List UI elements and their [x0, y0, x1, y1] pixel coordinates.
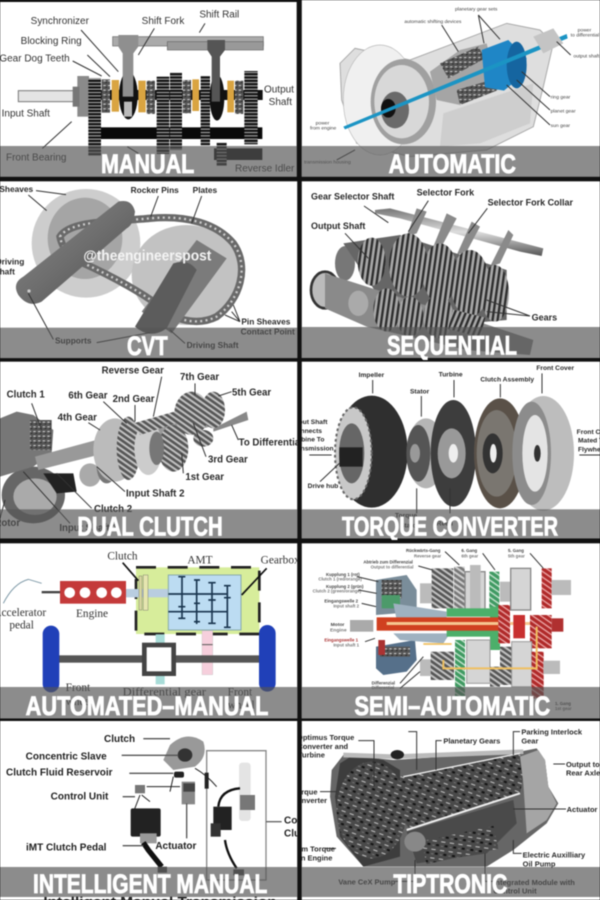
manual labels and leader lines: Reverse Idler [235, 164, 295, 175]
torque converter labels and leader lines: Turbine [439, 372, 463, 379]
tiptronic labels and leader lines: Parking Interlock [521, 728, 583, 737]
semi automatic labels and leader lines: Output to differential [371, 565, 413, 570]
tiptronic labels and leader lines [288, 728, 600, 896]
torque converter labels and leader lines: Reed [437, 521, 453, 528]
manual labels and leader lines: Blocking Ring [21, 36, 82, 47]
panel: cvt [0, 181, 297, 361]
dual clutch labels and leader lines: Clutch 1 [7, 390, 45, 401]
imt labels and leader lines: Clutch [104, 734, 135, 745]
cvt labels and leader lines: Driving Shaft [187, 340, 239, 350]
imt labels and leader lines [6, 734, 347, 900]
cvt title bar [0, 328, 297, 358]
amt labels and leader lines: Gearbox [261, 554, 300, 566]
dual clutch title bar [0, 509, 297, 538]
automatic labels and leader lines: sun gear [551, 123, 570, 129]
manual labels and leader lines: Input Shaft [2, 109, 50, 120]
cvt pulley and belt diagram [16, 189, 242, 334]
automatic labels and leader lines: transmission housing [304, 160, 351, 166]
panel: sequential [302, 181, 600, 360]
semi automatic labels and leader lines: 5. Gang [508, 548, 524, 553]
automatic labels and leader lines [304, 6, 600, 166]
tiptronic labels and leader lines: Main Engine [288, 853, 332, 862]
watermark: handle: @theengineerspost [83, 248, 212, 264]
semi automatic labels and leader lines: Clutch 1 (red/orange) [318, 577, 362, 582]
amt labels and leader lines: Differential gear [123, 687, 206, 699]
semi automatic labels and leader lines: Differential [372, 685, 394, 690]
automatic labels and leader lines: power [578, 27, 592, 33]
panel: torque converter [291, 362, 600, 541]
torque converter labels and leader lines: Clutch Assembly [480, 377, 534, 384]
dual clutch labels and leader lines: To Differential [239, 438, 303, 449]
panel: intelligent manual [0, 721, 347, 900]
dual clutch labels and leader lines: Reverse Gear [102, 366, 164, 377]
imt title bar [0, 867, 297, 897]
automatic title bar [302, 146, 600, 177]
cvt labels and leader lines: Sheaves [0, 184, 34, 194]
panel: manual [0, 2, 297, 179]
dual clutch labels and leader lines: 4th Gear [58, 413, 97, 424]
semi automatic labels and leader lines: Reverse gear [414, 553, 442, 558]
heading: intelligent manual: INTELLIGENT MANUAL [33, 869, 267, 899]
manual labels and leader lines [0, 10, 295, 175]
dual clutch labels and leader lines: 5th Gear [232, 387, 271, 398]
manual title bar [0, 146, 297, 177]
amt labels and leader lines: Front [66, 682, 91, 694]
manual labels and leader lines: Shift Rail [199, 10, 239, 21]
heading: automatic: AUTOMATIC [389, 149, 516, 179]
semi automatic title bar [302, 687, 600, 718]
imt labels and leader lines: Concentric Slave [26, 751, 107, 762]
automatic labels and leader lines: planet gear [551, 109, 576, 115]
automatic labels and leader lines: automatic shifting devices [404, 19, 462, 25]
semi automatic labels and leader lines [313, 548, 572, 711]
manual labels and leader lines: Synchronizer [31, 16, 90, 27]
amt labels and leader lines: wheel [66, 696, 93, 708]
semi automatic labels and leader lines: 6. Gang [461, 548, 478, 553]
dual clutch gearbox cutaway [0, 392, 248, 523]
imt labels and leader lines: Control Unit [51, 792, 109, 803]
automatic labels and leader lines: power [316, 121, 330, 127]
panel: automatic [302, 0, 600, 179]
amt labels and leader lines: wheel [228, 699, 255, 711]
heading: automated manual: AUTOMATED–MANUAL [26, 691, 268, 721]
heading: semi automatic: SEMI–AUTOMATIC [354, 691, 550, 721]
automatic labels and leader lines: planetary gear sets [455, 6, 498, 12]
semi automatic labels and leader lines: Differenzial [372, 680, 395, 685]
semi automatic labels and leader lines: Kupplung 1 (rot) [326, 572, 360, 577]
sequential labels and leader lines [311, 188, 574, 322]
torque converter labels and leader lines: Connects [292, 428, 322, 435]
semi automatic labels and leader lines: Motor [331, 622, 345, 628]
tiptronic title bar [302, 867, 600, 897]
semi automatic labels and leader lines: Kupplung 2 (grün) [326, 584, 364, 589]
manual labels and leader lines: Shift Fork [142, 16, 184, 27]
imt labels and leader lines: Actuator [155, 841, 196, 852]
torque converter labels and leader lines: Input Shaft [293, 419, 328, 426]
dual clutch labels and leader lines: Clutch 2 [94, 504, 132, 515]
tiptronic labels and leader lines: Gear [521, 736, 538, 745]
tiptronic labels and leader lines: Rear Axle [566, 769, 600, 778]
automatic labels and leader lines: ring gear [551, 95, 571, 101]
tiptronic labels and leader lines: Control Unit [493, 887, 537, 896]
dual clutch labels and leader lines [0, 366, 303, 534]
torque converter labels and leader lines: Turbine To [291, 437, 324, 444]
torque converter exploded view [335, 396, 574, 511]
panel: semi automatic [302, 543, 600, 721]
panel: dual clutch [0, 362, 303, 541]
torque converter labels and leader lines: Stator [410, 388, 430, 395]
amt system schematic [3, 567, 276, 692]
cvt labels and leader lines: Plates [193, 185, 218, 195]
torque converter title bar [302, 509, 600, 538]
manual labels and leader lines: Output [264, 84, 294, 95]
imt labels and leader lines: Clutch Fluid Reservoir [6, 767, 113, 778]
manual labels and leader lines: Gear Dog Teeth [0, 53, 70, 64]
torque converter labels and leader lines: Torque [395, 512, 417, 519]
tiptronic labels and leader lines: Output to [566, 760, 600, 769]
dual clutch labels and leader lines: 3rd Gear [208, 454, 248, 465]
torque converter labels and leader lines: Front Cover [536, 365, 574, 372]
manual labels and leader lines: Shaft [269, 97, 292, 108]
semi automatic colour cutaway [350, 565, 571, 698]
dual clutch labels and leader lines: Input Shaft 2 [126, 488, 184, 499]
heading: tiptronic: TIPTRONIC [393, 869, 507, 899]
amt labels and leader lines: pedal [9, 620, 34, 632]
semi automatic labels and leader lines: Input shaft 2 [333, 603, 360, 608]
semi automatic labels and leader lines: Engine [330, 627, 347, 633]
cvt labels and leader lines: Contact Point [241, 326, 295, 336]
torque converter labels and leader lines: Impeller [359, 372, 385, 379]
tiptronic labels and leader lines: Integrated Module with [493, 878, 575, 887]
tiptronic labels and leader lines: Converter [292, 796, 327, 805]
heading: dual clutch: DUAL CLUTCH [77, 511, 223, 541]
tiptronic labels and leader lines: Oil Pump [523, 859, 556, 868]
amt labels and leader lines [0, 550, 300, 711]
imt labels and leader lines: iMT Clutch Pedal [26, 842, 107, 853]
semi automatic labels and leader lines: Rückwärts-Gang [406, 548, 441, 553]
automatic labels and leader lines: to differential [571, 32, 599, 38]
heading: cvt: CVT [127, 331, 168, 361]
tiptronic labels and leader lines: Vane CeX Pump [338, 877, 396, 886]
heading: sequential: SEQUENTIAL [387, 330, 517, 360]
sequential labels and leader lines: Selector Fork Collar [488, 198, 574, 208]
tiptronic labels and leader lines: From Torque [289, 844, 335, 853]
semi automatic labels and leader lines: Abtrieb zum Differenzial [363, 560, 413, 565]
cvt labels and leader lines: Pin Sheaves [241, 316, 291, 326]
dual clutch labels and leader lines: 2nd Gear [113, 394, 155, 405]
tiptronic labels and leader lines: Actuator [567, 805, 598, 814]
semi automatic labels and leader lines: Eingangswelle 1 [324, 638, 359, 643]
torque converter labels and leader lines: Drive hub [308, 483, 338, 490]
torque converter labels and leader lines: Transmission [291, 445, 334, 452]
automatic labels and leader lines: from engine [310, 126, 337, 132]
cvt labels and leader lines: Supports [55, 336, 92, 346]
imt labels and leader lines: Conventional [284, 816, 347, 827]
tiptronic labels and leader lines: Planetary Gears [443, 736, 500, 745]
cvt labels and leader lines: Rocker Pins [131, 185, 179, 195]
tiptronic cutaway [330, 748, 558, 867]
semi automatic labels and leader lines: Clutch 2 (green/orange) [313, 589, 362, 594]
imt system components [131, 737, 282, 880]
automatic labels and leader lines: output shaft [573, 54, 600, 60]
manual gearbox diagram [18, 35, 263, 166]
cvt labels and leader lines [0, 184, 295, 350]
heading: manual: MANUAL [101, 149, 194, 179]
tiptronic labels and leader lines: Torque [293, 787, 317, 796]
torque converter labels and leader lines [291, 365, 600, 529]
semi automatic labels and leader lines: 1. Gang [555, 701, 571, 706]
amt labels and leader lines: Clutch [107, 550, 138, 562]
amt labels and leader lines: Engine [76, 608, 108, 620]
dual clutch labels and leader lines: 7th Gear [180, 372, 219, 383]
amt labels and leader lines: Front [228, 687, 253, 699]
tiptronic labels and leader lines: Converter and [297, 742, 349, 751]
sequential labels and leader lines: Output Shaft [311, 221, 365, 231]
panel: tiptronic [288, 721, 600, 900]
manual labels and leader lines: Front Bearing [6, 152, 66, 163]
torque converter labels and leader lines: Stator [400, 522, 420, 529]
tiptronic labels and leader lines: Optimus Torque [297, 733, 354, 742]
tiptronic labels and leader lines: Electric Auxilliary [523, 851, 586, 860]
semi automatic labels and leader lines: Input shaft 1 [333, 643, 360, 648]
dual clutch labels and leader lines: Input Shaft 1 [59, 523, 118, 534]
semi automatic labels and leader lines: 6th gear [461, 553, 478, 558]
sequential labels and leader lines: Selector Fork [417, 188, 474, 198]
panel: automated manual [0, 543, 300, 721]
dual clutch labels and leader lines: 1st Gear [185, 472, 224, 483]
imt labels and leader lines: Clutch [284, 828, 315, 839]
sequential title bar [302, 327, 600, 358]
semi automatic labels and leader lines: Eingangswelle 2 [324, 598, 359, 603]
sequential gearbox cluster [311, 208, 543, 355]
dual clutch labels and leader lines: 6th Gear [68, 390, 108, 401]
tiptronic labels and leader lines: Turbine [298, 751, 325, 760]
amt title bar [0, 687, 297, 718]
semi automatic labels and leader lines: 1st gear [555, 706, 572, 711]
amt labels and leader lines: AMT [187, 554, 213, 566]
sequential labels and leader lines: Gear Selector Shaft [311, 192, 394, 202]
automatic transmission cutaway [340, 23, 568, 157]
sequential labels and leader lines: Gears [532, 312, 557, 322]
semi automatic labels and leader lines: 5th gear [508, 553, 525, 558]
